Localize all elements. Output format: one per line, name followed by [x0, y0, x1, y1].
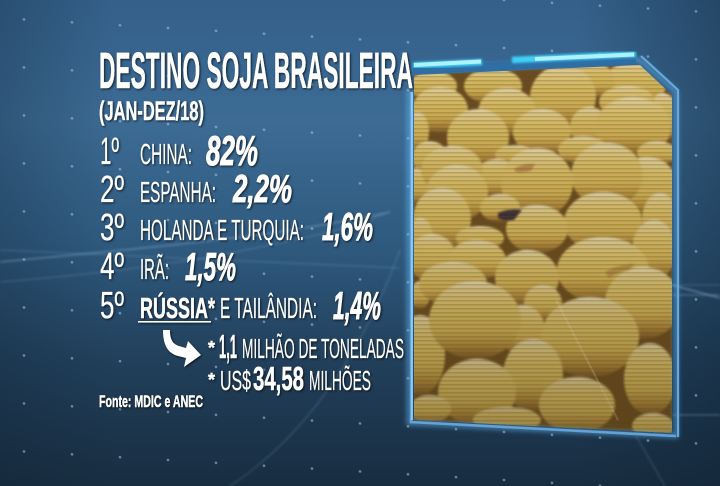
ranking row 5: Rússia e Tailândia: 1,4% — [333, 285, 381, 328]
callout: value in dollars — [208, 360, 371, 397]
ranking row 1: China: 82% — [206, 127, 258, 174]
ranking row 3: Holanda e Turquia: HOLANDA E TURQUIA: — [140, 215, 304, 247]
callout: volume in tons — [208, 328, 404, 365]
ranking row 4: Irã: 4º — [100, 246, 124, 288]
icon: curved arrow — [163, 330, 201, 367]
ranking row 1: China: CHINA: — [140, 139, 192, 171]
callout: volume in tons: 1,1 — [219, 328, 237, 365]
ranking row 2: Espanha: 2,2% — [232, 168, 292, 211]
callout: volume in tons: * — [208, 338, 215, 358]
photo frame: glowing blue border — [409, 54, 678, 437]
ranking row 2: Espanha: ESPANHA: — [140, 177, 216, 209]
ranking row 5: Rússia e Tailândia: 5º — [100, 285, 124, 327]
callout: value in dollars: US$ — [220, 365, 251, 396]
ranking row 5: Rússia e Tailândia: E TAILÂNDIA: — [220, 292, 317, 325]
ranking row 3: Holanda e Turquia: 1,6% — [322, 206, 373, 249]
ranking row 4: Irã — [100, 246, 236, 289]
source note: Fonte: MDIC e ANEC — [99, 392, 203, 411]
callout: value in dollars: 34,58 — [253, 360, 304, 397]
ranking row 1: China — [100, 127, 258, 174]
ranking row 5: Rússia e Tailândia: RÚSSIA* — [140, 291, 215, 325]
ranking row 2: Espanha — [100, 168, 292, 211]
text: MILHÕES — [309, 365, 371, 396]
callout: value in dollars: * — [208, 370, 215, 390]
photo panel: soybeans — [414, 65, 672, 433]
ranking row 4: Irã: 1,5% — [185, 246, 236, 289]
subtitle: period: (JAN-DEZ/18) — [99, 96, 204, 126]
ranking row 1: China: 1º — [100, 131, 119, 173]
ranking row 5: Rússia e Tailândia — [100, 285, 381, 328]
ranking row 2: Espanha: 2º — [100, 169, 124, 211]
ranking row 3: Holanda e Turquia: 3º — [100, 207, 124, 249]
ranking row 3: Holanda e Turquia — [100, 206, 373, 249]
text: MILHÃO DE TONELADAS — [242, 333, 404, 364]
ranking row 4: Irã: IRÃ: — [140, 252, 169, 286]
